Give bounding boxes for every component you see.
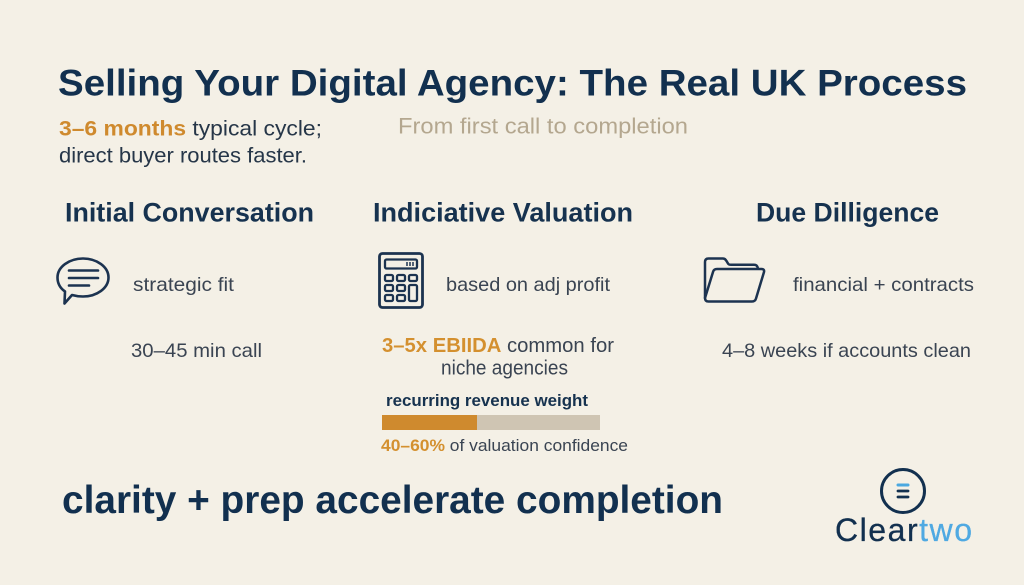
heading: initial conversation: Initial Conversation <box>65 198 314 228</box>
panel: due diligence <box>705 198 974 362</box>
text: adjusted profit: based on adj profit <box>446 274 611 296</box>
text: call duration: 30–45 min call <box>131 340 262 362</box>
text: valuation confidence: 40–60% of valuation confidence <box>381 436 628 455</box>
logo: Cleartwo <box>835 470 972 548</box>
icon: speech bubble <box>58 258 108 304</box>
text: EBITDA multiple: niche agencies <box>441 358 568 380</box>
footer message: clarity + prep accelerate completion <box>62 479 723 522</box>
text: EBITDA multiple <box>382 335 614 380</box>
text: EBITDA multiple: 3–5x EBIIDA common for <box>382 335 614 357</box>
heading: indicative valuation: Indiciative Valuation <box>373 198 633 228</box>
text block: typical cycle: direct buyer routes faster. <box>59 144 307 168</box>
heading: due diligence: Due Dilligence <box>756 198 939 228</box>
text block: typical cycle: 3–6 months typical cycle; <box>59 116 322 140</box>
panel: initial conversation <box>58 198 314 362</box>
text: strategic fit: strategic fit <box>133 274 235 296</box>
icon: folder <box>705 258 764 302</box>
title: Selling Your Digital Agency: The Real UK Process <box>58 62 967 104</box>
bar chart: recurring revenue weight <box>382 415 600 430</box>
text block: typical cycle <box>59 116 322 168</box>
icon: logo mark <box>882 470 924 512</box>
text: bar label: recurring revenue weight <box>386 392 589 410</box>
icon: calculator <box>380 254 422 308</box>
wordmark: Cleartwo <box>835 512 972 548</box>
subtitle: From first call to completion <box>398 113 688 138</box>
text: duration: 4–8 weeks if accounts clean <box>722 340 971 362</box>
text: financial and contracts: financial + contracts <box>793 274 974 296</box>
panel: indicative valuation <box>373 198 633 455</box>
